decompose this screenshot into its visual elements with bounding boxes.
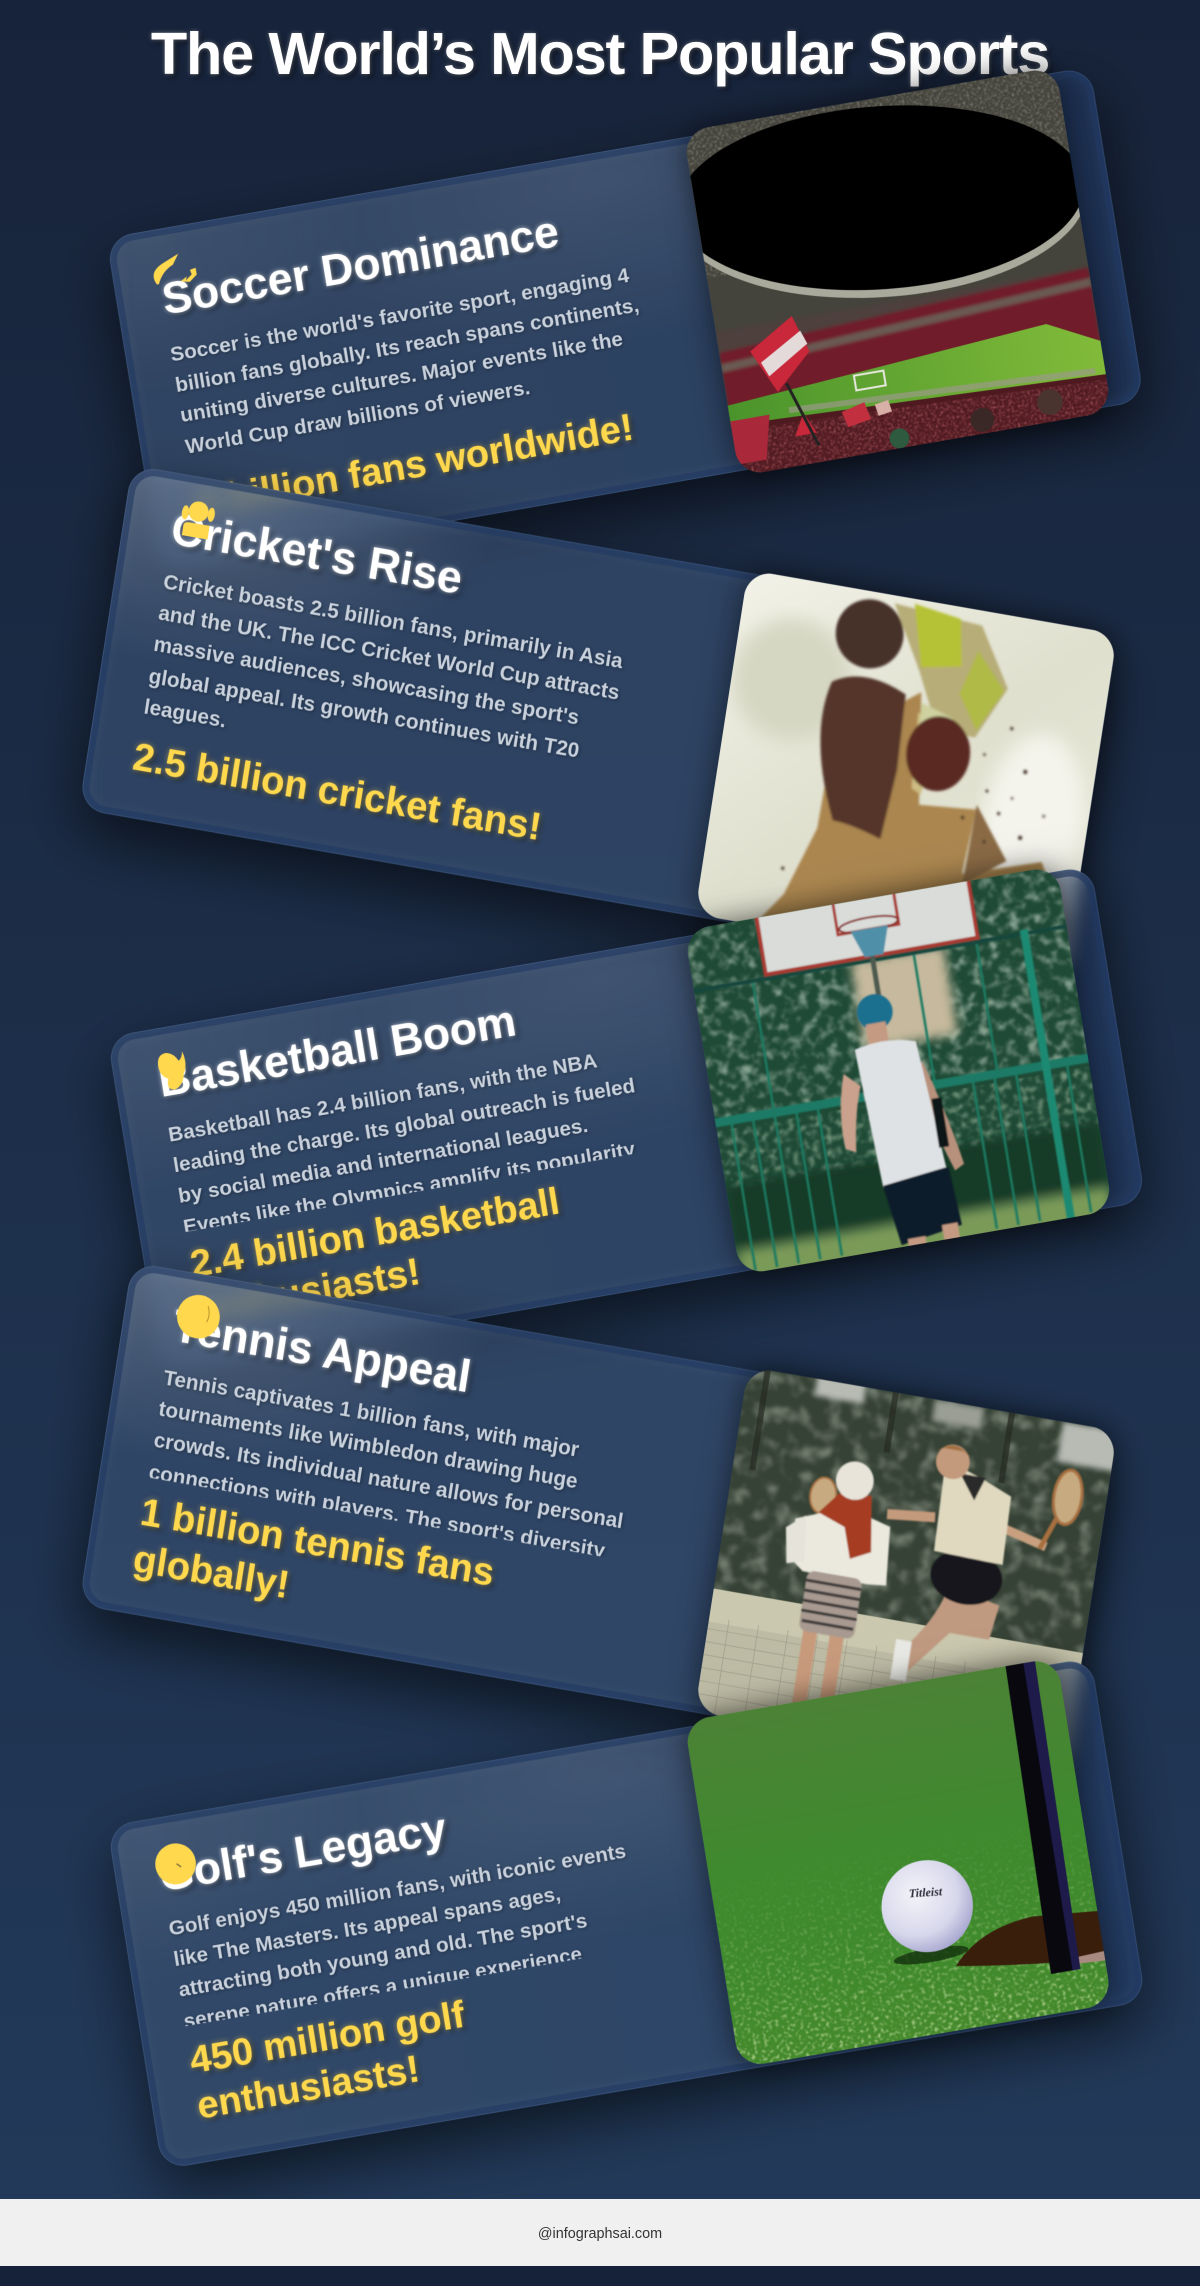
text: tennis description — [148, 1366, 625, 1563]
stat: basketball fans: enthusiasts! — [195, 1250, 423, 1331]
text: cricket description: Cricket boasts 2.5 billion fans, primarily in Asia — [162, 570, 624, 674]
text: soccer description: billion fans globally. Its reach spans continents, — [174, 294, 641, 397]
text: golf description: like The Masters. Its appeal spans ages, — [172, 1882, 562, 1971]
title: The World’s Most Popular Sports — [151, 20, 1049, 87]
text: golf description: Golf enjoys 450 million fans, with iconic events — [167, 1840, 628, 1941]
stat: golf fans — [187, 1993, 468, 2128]
heading: basketball: Basketball Boom — [155, 996, 519, 1107]
text: tennis description: tournaments like Wimbledon drawing huge — [157, 1398, 579, 1494]
text: soccer description: World Cup draw billions of viewers. — [184, 376, 532, 458]
text: basketball description — [167, 1050, 637, 1232]
text: cricket description: and the UK. The ICC Cricket World Cup attracts — [157, 602, 621, 705]
text: cricket description: massive audiences, showcasing the sport's — [152, 633, 581, 730]
text: basketball description: leading the charge. Its global outreach is fueled — [172, 1075, 637, 1177]
text: basketball description: by social media and international leagues. — [177, 1114, 590, 1208]
footer: @infographsai.com — [538, 2226, 662, 2242]
panel: golf — [107, 1657, 1146, 2170]
heading: tennis: Tennis Appeal — [170, 1301, 474, 1403]
panel: cricket — [79, 465, 1117, 981]
text: tennis description: connections with players. The sport's diversity — [148, 1460, 607, 1563]
stat: tennis fans: globally! — [130, 1537, 292, 1607]
text: soccer description: uniting diverse cultures. Major events like the — [179, 328, 625, 428]
icon: soccer ball — [153, 254, 197, 285]
panel: tennis — [79, 1262, 1117, 1777]
text: soccer description: Soccer is the world's favorite sport, engaging 4 — [169, 264, 631, 367]
text: basketball description: Basketball has 2.4 billion fans, with the NBA — [167, 1050, 599, 1147]
image: stadium — [683, 66, 1112, 476]
image: tennis players — [695, 1366, 1117, 1776]
stat: golf fans: enthusiasts! — [194, 2047, 423, 2128]
text: cricket description — [142, 570, 624, 762]
heading: cricket: Cricket's Rise — [168, 503, 466, 604]
heading: golf: Golf's Legacy — [156, 1803, 450, 1901]
stat: tennis fans: 1 billion tennis fans — [138, 1490, 497, 1595]
stat: cricket fans: 2.5 billion cricket fans! — [130, 735, 544, 849]
image: golf ball — [684, 1657, 1112, 2068]
text: tennis description: crowds. Its individual nature allows for personal — [152, 1429, 625, 1534]
text: golf description — [167, 1840, 628, 2026]
image: golf ball: Titleist — [908, 1884, 943, 1900]
text: cricket description: global appeal. Its growth continues with T20 — [147, 664, 581, 762]
text: golf description: attracting both young and old. The sport's — [177, 1909, 589, 2002]
icon: golf ball — [154, 1843, 196, 1885]
text: tennis description: Tennis captivates 1 billion fans, with major — [162, 1366, 580, 1462]
heading: soccer: Soccer Dominance — [158, 206, 562, 324]
image: basketball court — [684, 865, 1113, 1275]
image: cricket player — [695, 570, 1117, 979]
panel: basketball — [107, 865, 1146, 1373]
text: soccer description — [169, 264, 641, 458]
icon: cricket player — [182, 501, 216, 540]
stat: basketball fans: 2.4 billion basketball — [187, 1180, 562, 1286]
icon: basketball — [158, 1051, 186, 1090]
text: cricket description: leagues. — [142, 695, 228, 733]
stat: golf fans: 450 million golf — [187, 1993, 468, 2082]
panel: soccer — [106, 66, 1145, 572]
stat: soccer fans: 4 billion fans worldwide! — [192, 406, 636, 524]
footer — [0, 2199, 1200, 2266]
icon: tennis ball — [176, 1294, 220, 1339]
